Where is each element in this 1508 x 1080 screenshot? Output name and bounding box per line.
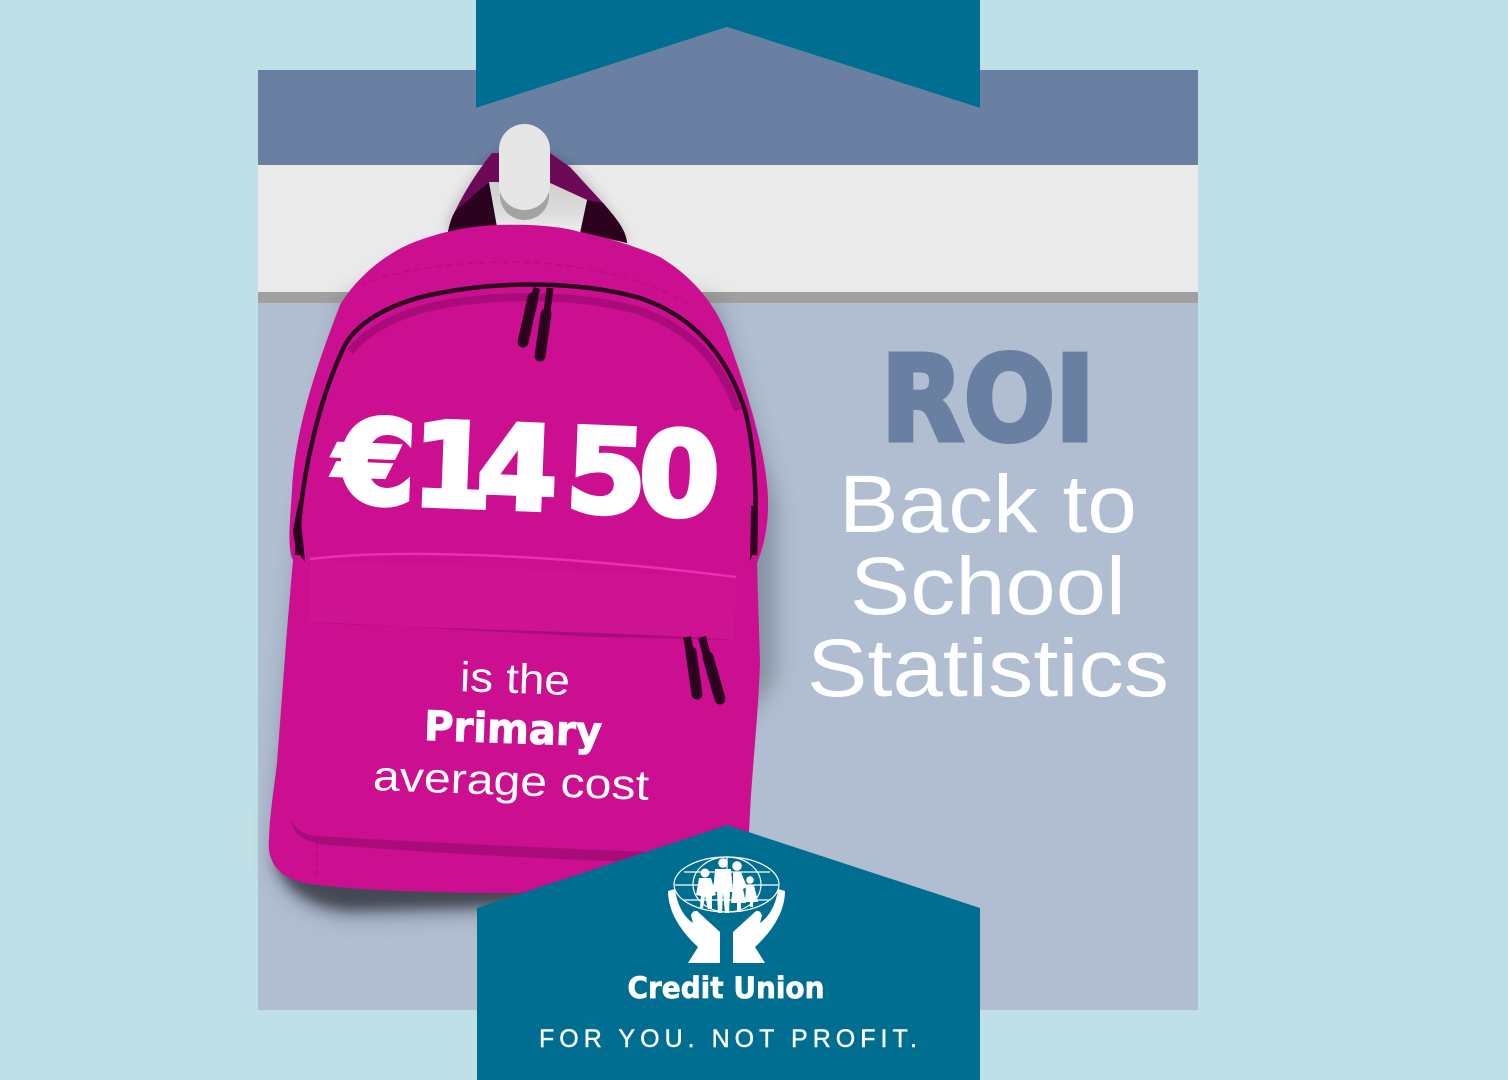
pocket highlight (310, 554, 736, 577)
backpack caption: average cost (372, 752, 650, 809)
logo: Credit Union (628, 857, 824, 1005)
globe (674, 857, 779, 912)
top ribbon (476, 0, 980, 108)
bottom stitching (316, 843, 318, 877)
top zip pullers (523, 288, 550, 356)
backpack body (269, 225, 768, 893)
logo name: Credit Union (628, 971, 824, 1005)
heading: ROI (881, 330, 1095, 468)
pocket flap (310, 560, 736, 640)
icon: backpack (269, 153, 768, 893)
pocket seam (290, 817, 670, 862)
bag top stitching (361, 262, 690, 305)
heading: Statistics (807, 623, 1169, 714)
hook (499, 124, 550, 220)
heading (807, 330, 1169, 714)
panel: wall scene (258, 27, 1198, 1010)
main zip shadow (350, 297, 738, 410)
heading: School (850, 541, 1126, 632)
main zip (297, 285, 756, 555)
backpack caption (372, 653, 650, 809)
price: €1450 (330, 395, 722, 544)
backpack caption: is the (459, 653, 571, 704)
family (696, 858, 758, 913)
tagline: FOR YOU. NOT PROFIT. (539, 1025, 917, 1053)
pocket zip pullers (687, 637, 720, 699)
backpack shadow (272, 250, 775, 918)
hands (668, 889, 785, 963)
bottom ribbon (477, 825, 980, 1080)
backpack handle (446, 153, 629, 243)
heading: Back to (839, 459, 1137, 550)
backpack caption: Primary (423, 702, 603, 756)
